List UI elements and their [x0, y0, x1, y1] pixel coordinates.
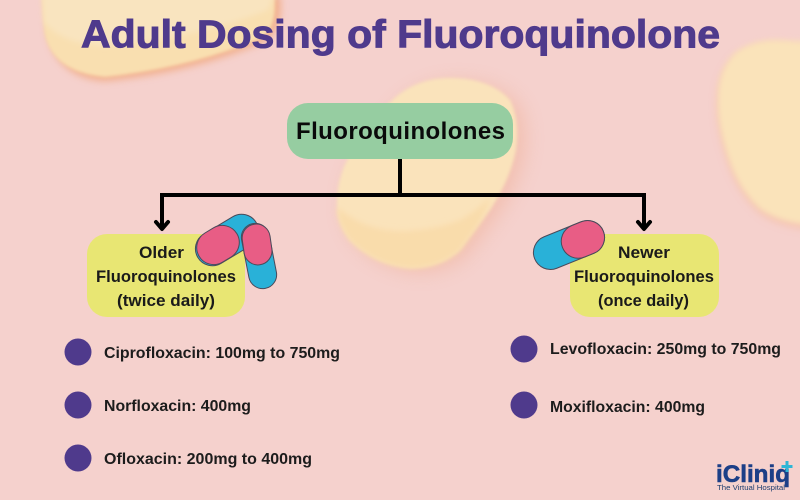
box: newer fluoroquinolones: Newer	[618, 243, 670, 262]
tablet: right	[717, 40, 800, 230]
list item: Norfloxacin	[64, 392, 251, 418]
box: newer fluoroquinolones: Fluoroquinolones	[574, 267, 714, 286]
icon: capsule	[528, 215, 610, 275]
list item: Moxifloxacin	[510, 392, 705, 418]
list item: Ofloxacin: Ofloxacin: 200mg to 400mg	[104, 451, 312, 468]
box: newer fluoroquinolones	[570, 234, 719, 317]
connector: tree lines	[160, 159, 646, 195]
box: older fluoroquinolones: Older	[139, 243, 184, 262]
tablet: centre	[337, 78, 525, 272]
logo: iCliniq: iCliniq	[716, 461, 790, 488]
box: older fluoroquinolones: (twice daily)	[117, 291, 215, 310]
arrow: left	[156, 195, 168, 229]
list item: Norfloxacin: Norfloxacin: 400mg	[104, 398, 251, 415]
title: Adult Dosing of Fluoroquinolone	[81, 14, 720, 56]
list item: Ciprofloxacin	[64, 338, 340, 366]
box: Fluoroquinolones: Fluoroquinolones	[296, 118, 505, 145]
box: older fluoroquinolones	[87, 234, 245, 317]
box: newer fluoroquinolones: (once daily)	[598, 291, 689, 310]
arrow: right	[638, 195, 650, 229]
list item: Levofloxacin: Levofloxacin: 250mg to 750mg	[550, 341, 781, 358]
list item: Levofloxacin	[510, 336, 781, 362]
list item: Moxifloxacin: Moxifloxacin: 400mg	[550, 399, 705, 416]
logo: iCliniq: The Virtual Hospital	[717, 483, 785, 492]
tablet: top left	[42, 0, 281, 81]
icon: crossed capsules	[189, 208, 279, 291]
box: Fluoroquinolones	[287, 103, 513, 159]
list item: Ciprofloxacin: Ciprofloxacin: 100mg to 750mg	[104, 345, 340, 362]
list item: Ofloxacin	[64, 444, 312, 472]
box: older fluoroquinolones: Fluoroquinolones	[96, 267, 236, 286]
